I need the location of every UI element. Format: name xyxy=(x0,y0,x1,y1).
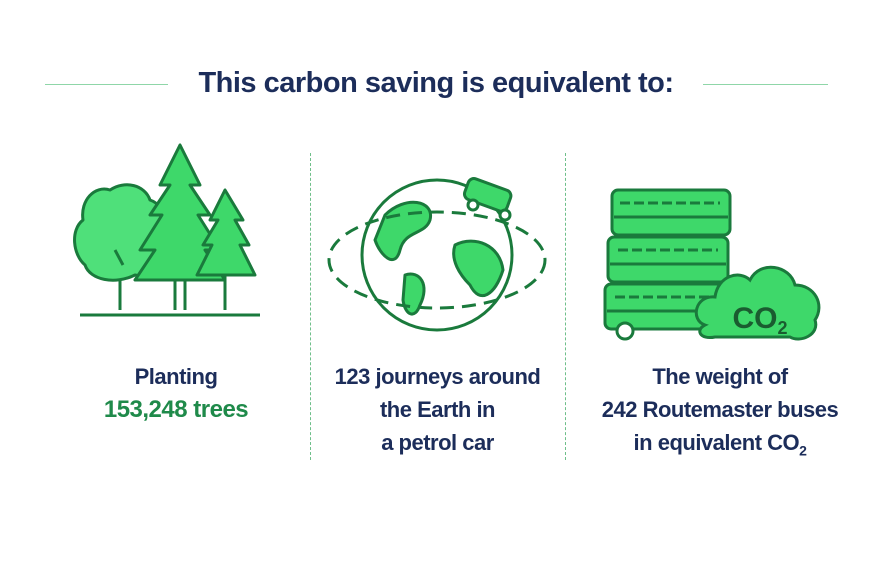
icon: buses and CO2 xyxy=(604,188,820,340)
title: This carbon saving is equivalent to: xyxy=(198,67,674,99)
icon: globe with car xyxy=(328,177,546,332)
text: journeys: a petrol car xyxy=(381,430,494,455)
text: journeys: 123 journeys around xyxy=(335,364,540,389)
text: buses: 242 Routemaster buses xyxy=(602,397,838,422)
icon: buses and CO2: CO xyxy=(732,302,777,335)
icon: buses and CO2: 2 xyxy=(777,318,788,338)
text: journeys xyxy=(335,364,540,455)
icon: trees xyxy=(73,143,260,316)
text: buses xyxy=(602,364,838,458)
text: trees: 153,248 trees xyxy=(104,396,248,423)
text: buses: The weight of xyxy=(652,364,788,389)
text: journeys: the Earth in xyxy=(380,397,495,422)
text: trees: Planting xyxy=(135,364,217,389)
text: buses: in equivalent CO2 xyxy=(634,430,806,458)
text: trees xyxy=(104,364,248,423)
